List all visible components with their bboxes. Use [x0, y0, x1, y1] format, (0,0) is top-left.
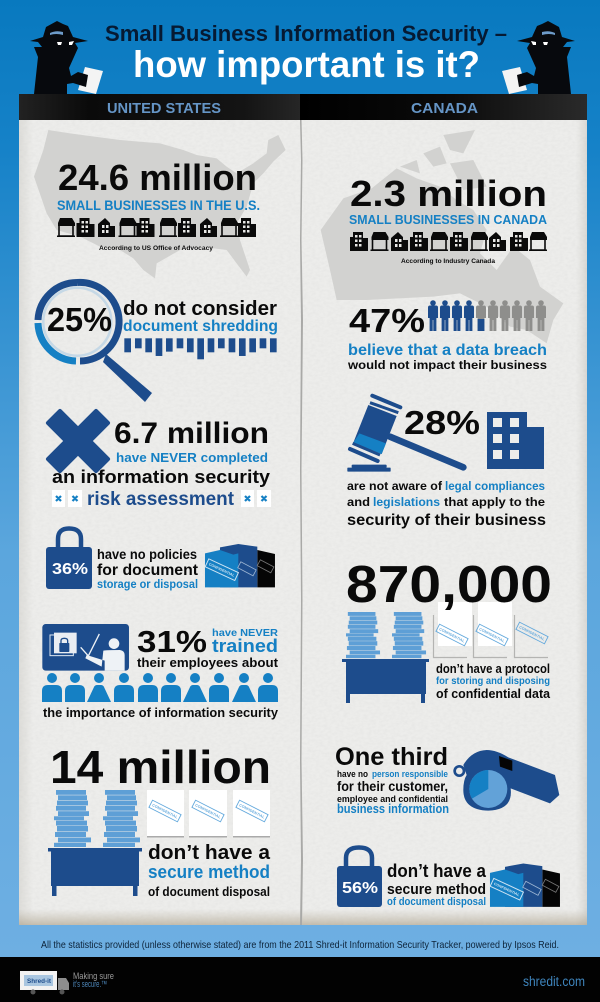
stat: 47%: 47%: [349, 302, 425, 339]
text: legal compliances: that apply to the: [444, 495, 545, 509]
icons: confidential papers US: CONFIDENTIAL: [151, 803, 179, 820]
stat: 870,000: 870,000: [346, 556, 552, 614]
footer bar: [0, 957, 600, 1002]
text: no policies: [97, 546, 199, 591]
icon: desk with stacks Canada: [342, 612, 429, 703]
text: one third: [335, 743, 449, 816]
text: no secure method US: of document disposal: [148, 885, 270, 899]
text: no secure method US: don’t have a: [148, 842, 271, 864]
text: data breach: would not impact their business: [347, 358, 547, 372]
icons: confidential papers Canada: CONFIDENTIAL: [518, 625, 546, 642]
spy right: [502, 21, 575, 94]
stat: 31% trained: have NEVER: [212, 627, 278, 639]
footer bar: shredit.com: [523, 974, 585, 989]
source: US: According to US Office of Advocacy: [99, 245, 213, 252]
stat: 2.3 million: [349, 173, 548, 227]
icon: training board: [42, 624, 129, 671]
icons: confidential papers Canada: CONFIDENTIAL: [478, 627, 506, 644]
icon: folders Canada: CONFIDENTIAL: [493, 882, 521, 898]
stat: 31% trained: 31%: [137, 624, 207, 659]
icons: confidential papers Canada: [434, 602, 548, 658]
column header bar: UNITED STATES: [107, 100, 221, 117]
text: one third: One third: [335, 743, 448, 771]
icons: US businesses: [57, 218, 256, 237]
text: one third: have no: [337, 769, 368, 780]
text: no policies: have no policies: [97, 546, 197, 562]
text: document shredding: document shredding: [123, 318, 278, 335]
footer bar: Making sure: [73, 971, 114, 982]
text: no secure method Canada: secure method: [387, 881, 486, 898]
stat: 6.7 million: risk assessment: [87, 489, 235, 510]
text: one third: business information: [337, 802, 449, 816]
stat: 2.3 million: SMALL BUSINESSES IN CANADA: [349, 212, 548, 227]
paper panel: [19, 120, 587, 925]
icon: padlock 56%: [337, 848, 382, 907]
stat: 6.7 million: [52, 417, 270, 510]
stat: 6.7 million: an information security: [52, 467, 270, 487]
stat: 31% trained: trained: [212, 636, 278, 656]
column header bar: [19, 94, 587, 120]
text: legal compliances: security of their business: [347, 512, 546, 529]
icons: confidential papers US: CONFIDENTIAL: [238, 803, 266, 820]
spy left: [30, 21, 103, 94]
icon: padlock 36%: [46, 528, 92, 589]
icons: Canada businesses: [350, 232, 547, 251]
map: USA: [34, 130, 286, 278]
icons: confidential papers US: [147, 790, 270, 838]
text: legal compliances: [347, 479, 546, 529]
text: data breach: [347, 342, 547, 372]
icons: employees row: [42, 673, 278, 702]
text: legal compliances: and: [347, 495, 370, 509]
icon: office building: [487, 412, 544, 469]
column header bar: CANADA: [411, 100, 478, 117]
text: no secure method Canada: [387, 861, 487, 908]
title: how important is it?: [133, 44, 480, 85]
source: Canada: According to Industry Canada: [401, 258, 495, 265]
map: Canada: [321, 130, 563, 343]
icon: whistle: [455, 750, 559, 811]
text: document shredding: [123, 298, 278, 335]
icons: confidential papers US: CONFIDENTIAL: [194, 803, 222, 820]
icons: confidential papers Canada: CONFIDENTIAL: [438, 627, 466, 644]
icon: folders US: CONFIDENTIAL: [208, 562, 236, 578]
text: data breach: believe that a data breach: [348, 342, 547, 359]
text: no policies: for document: [97, 562, 199, 579]
stat: 2.3 million: 2.3 million: [350, 173, 547, 214]
icons: small x boxes: [52, 490, 271, 507]
text: legal compliances: legal compliances: [445, 479, 545, 493]
text: one third: for their customer,: [337, 779, 448, 794]
icon: desk with stacks US: [48, 790, 142, 896]
stat: 14 million: 14 million: [50, 741, 271, 793]
text: one third: employee and confidential: [337, 794, 448, 805]
text: protocol: [436, 661, 551, 701]
icon: gavel: [347, 396, 463, 472]
footer bar: Shred-it: [27, 978, 52, 985]
text: no secure method US: secure method: [148, 862, 270, 882]
stat: 6.7 million: have NEVER completed: [116, 451, 268, 465]
text: no policies: storage or disposal: [97, 579, 198, 591]
stat: 24.6 million: 24.6 million: [58, 157, 257, 198]
text: no secure method US: [148, 842, 271, 899]
icon: folders US: [205, 544, 275, 587]
text: protocol: don’t have a protocol: [436, 661, 550, 676]
stat: 31% trained: their employees about: [137, 655, 279, 670]
text: legal compliances: are not aware of: [347, 479, 443, 493]
icon: shredded strips: [124, 338, 277, 359]
icon: padlock 56%: 56%: [342, 880, 378, 897]
stat: 31% trained: [137, 624, 279, 670]
text: protocol: for storing and disposing: [436, 675, 550, 687]
text: document shredding: do not consider: [123, 298, 277, 320]
text: one third: person responsible: [372, 769, 448, 780]
icon: large X: [27, 390, 129, 492]
text: importance of security: the importance of information security: [43, 706, 278, 720]
icon: folders Canada: [490, 863, 560, 907]
text: protocol: of confidential data: [436, 686, 551, 701]
stat: 6.7 million: 6.7 million: [114, 417, 269, 450]
title: [105, 21, 507, 85]
text: no secure method Canada: don’t have a: [387, 861, 487, 881]
icon: padlock 36%: 36%: [52, 561, 88, 578]
text: no secure method Canada: of document disposal: [387, 896, 486, 908]
stat: 24.6 million: SMALL BUSINESSES IN THE U.S.: [57, 198, 260, 213]
title: Small Business Information Security –: [105, 21, 507, 46]
footer bar: it’s secure.™: [73, 979, 107, 989]
text: legal compliances: legislations: [373, 495, 440, 509]
stat: 28%: 28%: [404, 404, 480, 441]
stat: 25%: 25%: [47, 301, 112, 338]
icon: magnifying glass: [38, 282, 152, 402]
icons: people 47%: [428, 300, 546, 331]
